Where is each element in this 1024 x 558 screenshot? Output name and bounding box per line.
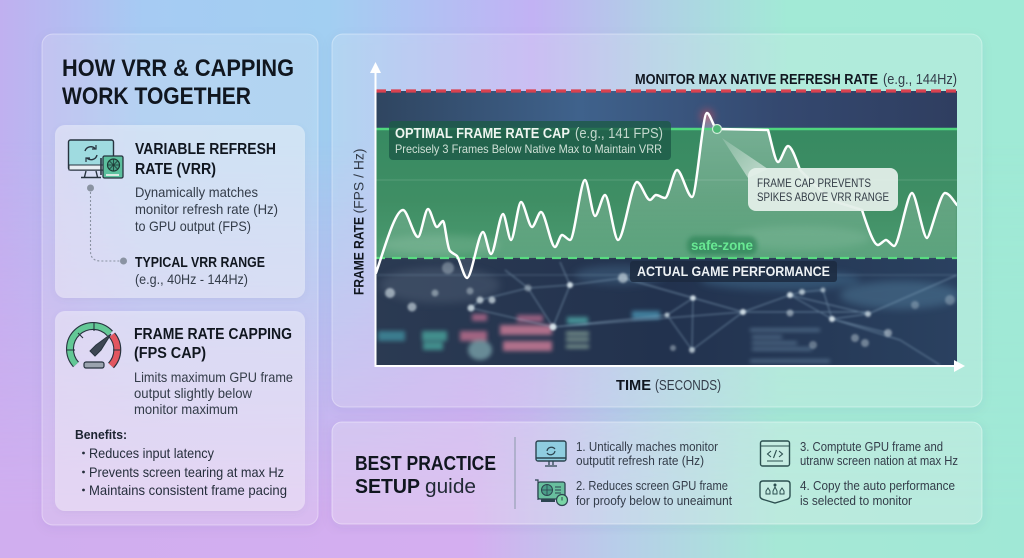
glow: capped spike: [700, 109, 714, 123]
text: typical VRR range: [135, 255, 265, 287]
text: step 1: outputit refresh rate (Hz): [576, 453, 704, 468]
heading: best practice setup guide: guide: [425, 476, 476, 498]
heading: best practice setup guide: BEST PRACTICE: [355, 453, 496, 475]
icon: code window: [760, 441, 790, 466]
card: variable refresh rate: [55, 125, 305, 298]
title: HOW VRR & CAPPING: [62, 55, 294, 82]
axis label: frame rate: FRAME RATE: [350, 217, 366, 295]
text: step 3: utranw screen nation at max Hz: [800, 453, 958, 468]
line: safe-zone lower bound: [376, 257, 957, 259]
text: step 1: 1. Untically maches monitor: [576, 439, 719, 454]
text: VRR description: monitor refresh rate (Hz): [135, 201, 278, 217]
axis label: frame rate: (FPS / Hz): [350, 148, 366, 214]
heading: frame rate capping: [134, 326, 292, 362]
title: [62, 55, 294, 110]
icon: users shield: [760, 481, 790, 503]
axis label: time: [616, 378, 721, 394]
text: step 2: for proofy below to uneaimunt: [576, 493, 732, 508]
image: blurred network background: [376, 180, 960, 365]
axis label: time: TIME: [616, 378, 651, 394]
list: benefits: Reduces input latency: [89, 445, 214, 461]
list: benefits: Maintains consistent frame pacing: [89, 482, 287, 498]
line: actual game performance curve: [376, 113, 957, 278]
line: optimal frame rate cap: [376, 128, 957, 130]
text: capping description: monitor maximum: [134, 401, 238, 417]
heading: best practice setup guide: SETUP: [355, 476, 420, 498]
text: VRR description: [135, 184, 278, 234]
heading: best practice setup guide: [355, 453, 496, 498]
text: capping description: [134, 369, 293, 417]
callout: frame cap prevents spikes: [722, 138, 898, 211]
text: step 1: [576, 439, 719, 468]
callout: frame cap prevents spikes: SPIKES ABOVE VRR RANGE: [757, 190, 889, 204]
list: benefits: Prevents screen tearing at max Hz: [89, 464, 284, 480]
list: benefits: Benefits:: [75, 427, 127, 442]
axis: vertical: [370, 62, 381, 367]
icon: monitor with GPU: [68, 140, 123, 178]
icon: monitor refresh: [536, 441, 566, 466]
text: step 2: [576, 478, 732, 508]
title: WORK TOGETHER: [62, 83, 251, 110]
heading: frame rate capping: (FPS CAP): [134, 345, 206, 362]
list: benefits: [75, 427, 287, 498]
text: step 4: is selected to monitor: [800, 493, 913, 508]
callout: frame cap prevents spikes: FRAME CAP PREVENTS: [757, 176, 871, 190]
axis: horizontal: [375, 360, 965, 372]
label: actual game performance: ACTUAL GAME PERFORMANCE: [637, 263, 830, 279]
chart: area under performance curve: [376, 113, 957, 278]
label: monitor max native refresh rate: (e.g., 144Hz): [883, 72, 957, 88]
heading: VRR: VARIABLE REFRESH: [135, 141, 276, 158]
heading: VRR: [135, 141, 276, 178]
label: optimal frame rate cap: OPTIMAL FRAME RATE CAP: [395, 126, 570, 142]
icon: speedometer gauge: [67, 323, 121, 368]
text: VRR description: Dynamically matches: [135, 184, 258, 200]
panel: left explainer: [42, 34, 318, 525]
panel: frame rate chart: [332, 34, 982, 407]
label: optimal frame rate cap: (e.g., 141 FPS): [575, 126, 663, 142]
icon: graphics card with clock: [535, 480, 568, 506]
text: step 3: 3. Comptute GPU frame and: [800, 439, 943, 454]
line: maximum native refresh rate: [376, 89, 957, 93]
heading: VRR: RATE (VRR): [135, 161, 216, 178]
label: monitor max native refresh rate: MONITOR MAX NATIVE REFRESH RATE: [635, 72, 878, 88]
text: capping description: output slightly below: [134, 385, 253, 401]
card: frame rate capping: [55, 311, 305, 511]
label: optimal frame rate cap: [389, 121, 671, 160]
text: step 3: [800, 439, 958, 468]
axis label: time: (SECONDS): [655, 378, 721, 394]
connector: dotted line to VRR range: [87, 184, 127, 264]
text: typical VRR range: TYPICAL VRR RANGE: [135, 255, 265, 271]
chart: plot background bands: [376, 91, 957, 366]
marker: frame cap point: [712, 124, 722, 134]
axis label: frame rate: [350, 148, 366, 295]
text: step 4: 4. Copy the auto performance: [800, 478, 955, 493]
label: optimal frame rate cap: Precisely 3 Frames Below Native Max to Maintain VRR: [395, 142, 662, 156]
text: VRR description: to GPU output (FPS): [135, 218, 251, 234]
text: step 2: 2. Reduces screen GPU frame: [576, 478, 728, 493]
text: capping description: Limits maximum GPU frame: [134, 369, 293, 385]
text: typical VRR range: (e.g., 40Hz - 144Hz): [135, 271, 248, 287]
heading: frame rate capping: FRAME RATE CAPPING: [134, 326, 292, 343]
text: step 4: [800, 478, 955, 508]
panel: best practice setup guide: [332, 422, 982, 524]
label: actual game performance: [630, 261, 837, 282]
label: safe-zone: safe-zone: [691, 237, 753, 253]
